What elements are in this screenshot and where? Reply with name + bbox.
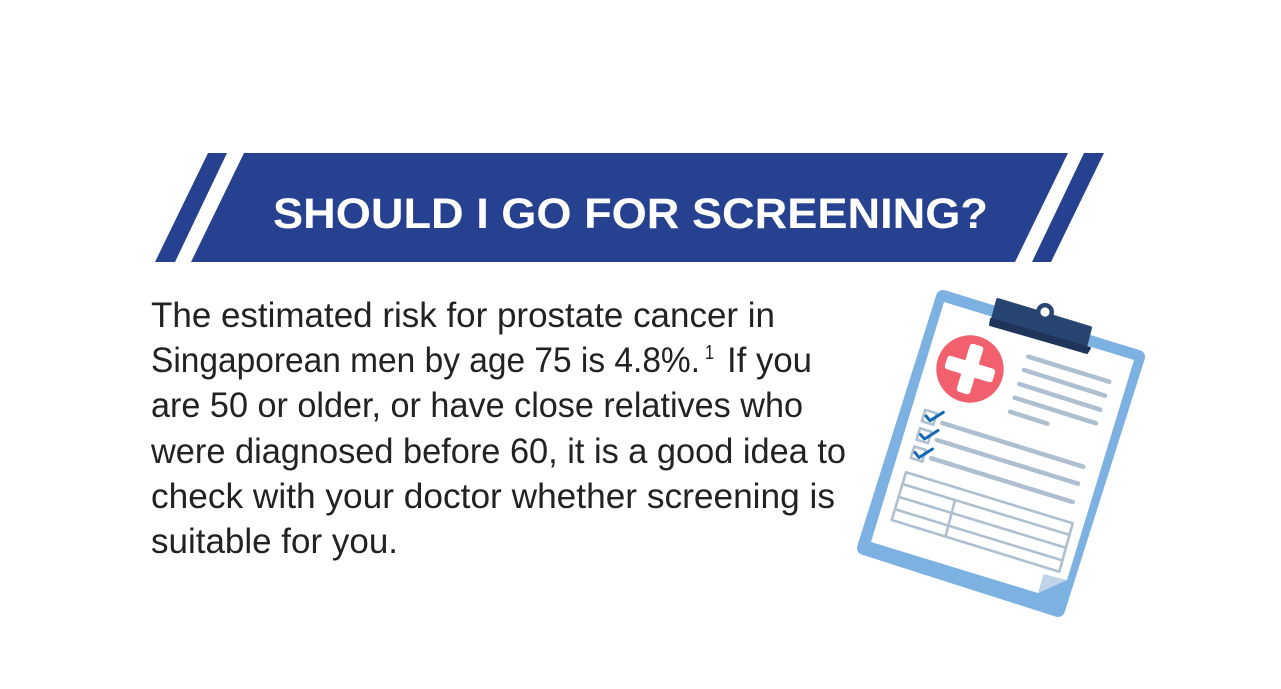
body text block: were diagnosed before 60, it is a good idea to (150, 432, 846, 471)
body text block: The estimated risk for prostate cancer in (151, 296, 775, 335)
banner right stripe (1032, 153, 1104, 262)
body text block: 1 (705, 342, 714, 364)
clip (990, 300, 1090, 353)
banner main shape (191, 153, 1068, 262)
text lines beside badge (1010, 357, 1109, 424)
paper sheet (871, 302, 1134, 593)
medical cross badge (936, 335, 1004, 403)
body text block: check with your doctor whether screening is (151, 477, 835, 516)
form table (892, 472, 1073, 572)
body text block: are 50 or older, or have close relatives who (151, 386, 803, 425)
body text block: If you (727, 341, 812, 380)
body text block: suitable for you. (151, 522, 398, 561)
icon: clipboard (864, 297, 1138, 610)
banner left stripe (155, 153, 227, 262)
body text block (150, 296, 846, 561)
paper corner fold (1038, 574, 1067, 593)
clipboard board (864, 297, 1138, 610)
checklist (911, 410, 1083, 502)
title banner (155, 153, 1104, 262)
heading: SHOULD I GO FOR SCREENING? (273, 190, 988, 238)
body text block: Singaporean men by age 75 is 4.8%. (151, 341, 700, 380)
